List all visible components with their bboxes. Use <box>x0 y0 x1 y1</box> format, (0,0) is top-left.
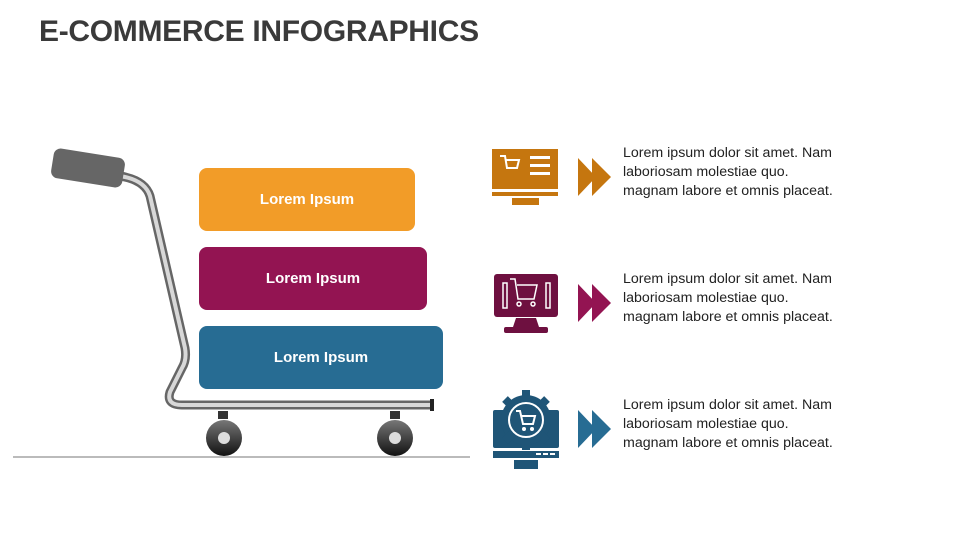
text block 1: magnam labore et omnis placeat. <box>623 183 833 199</box>
arrow magenta <box>578 284 611 322</box>
text block 3: magnam labore et omnis placeat. <box>623 435 833 451</box>
text block 3: laboriosam molestiae quo. <box>623 416 789 432</box>
arrow blue <box>578 410 611 448</box>
text block 3: Lorem ipsum dolor sit amet. Nam <box>623 397 832 413</box>
text block 1 <box>623 145 833 199</box>
box: magenta <box>199 247 427 310</box>
box: orange <box>199 168 415 231</box>
box: orange: Lorem Ipsum <box>260 191 354 208</box>
title: E-COMMERCE INFOGRAPHICS <box>39 15 479 48</box>
text block 2: Lorem ipsum dolor sit amet. Nam <box>623 271 832 287</box>
box: blue: Lorem Ipsum <box>274 349 368 366</box>
text block 2: magnam labore et omnis placeat. <box>623 309 833 325</box>
arrow orange <box>578 158 611 196</box>
box: magenta: Lorem Ipsum <box>266 270 360 287</box>
icon: gear monitor blue <box>493 390 559 469</box>
wheels <box>206 411 413 456</box>
box: blue <box>199 326 443 389</box>
text block 2: laboriosam molestiae quo. <box>623 290 789 306</box>
text block 1: Lorem ipsum dolor sit amet. Nam <box>623 145 832 161</box>
icon: monitor cart orange <box>492 149 558 205</box>
text block 1: laboriosam molestiae quo. <box>623 164 789 180</box>
text block 2 <box>623 271 833 325</box>
icon: monitor cart magenta <box>494 274 558 333</box>
cart frame <box>50 148 434 411</box>
text block 3 <box>623 397 833 451</box>
ground line <box>13 456 470 458</box>
